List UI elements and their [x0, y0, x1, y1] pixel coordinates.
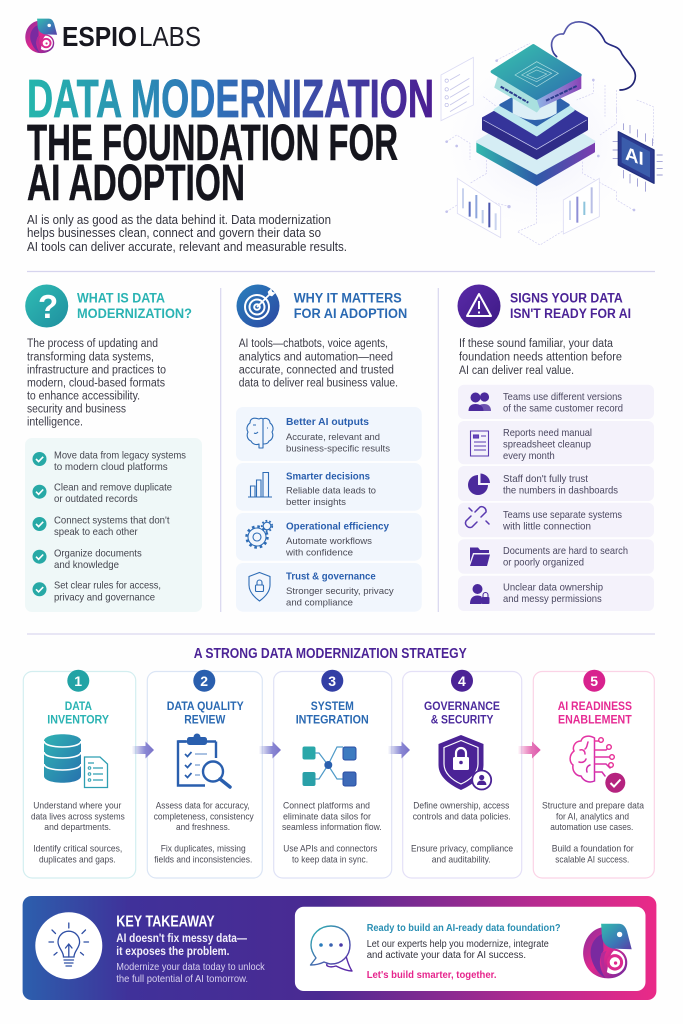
- number badge: 3: [328, 673, 336, 689]
- number badge: 1: [74, 673, 82, 689]
- step text: [282, 801, 382, 866]
- step text: Define ownership, access: [413, 801, 510, 812]
- sign: manual reports: spreadsheet cleanup: [503, 438, 591, 450]
- step heading: ENABLEMENT: [558, 712, 632, 726]
- card: better AI outputs: [236, 407, 422, 461]
- icon: target: [236, 284, 280, 328]
- description: [27, 338, 166, 428]
- icon: person with lock: [470, 584, 490, 604]
- check item 1: to modern cloud platforms: [54, 461, 168, 473]
- check item 2: or outdated records: [54, 493, 138, 505]
- step text: Fix duplicates, missing: [161, 843, 246, 854]
- check item 4: and knowledge: [54, 559, 119, 571]
- check item 5: privacy and governance: [54, 592, 155, 604]
- icon: chameleon logo mark: [25, 19, 57, 53]
- step text: scalable AI success.: [555, 855, 629, 866]
- step heading: AI READINESS: [558, 699, 632, 713]
- icon: people: [468, 392, 491, 411]
- step text: seamless information flow.: [282, 822, 382, 833]
- step heading: GOVERNANCE: [424, 699, 500, 713]
- hero illustration: isometric data stack with cloud and AI chip: [430, 22, 663, 245]
- intro text: [27, 213, 347, 254]
- sign: separate systems: Teams use separate systems: [503, 509, 622, 521]
- step text: eliminate data silos for: [283, 811, 371, 822]
- icon: warning: [458, 284, 500, 328]
- step text: automation use cases.: [550, 822, 633, 833]
- bar chart card left: [457, 178, 501, 238]
- call to action text: Let's build smarter, together.: [367, 969, 497, 981]
- step text: for AI, analytics and: [556, 811, 629, 822]
- step heading: DATA: [65, 699, 92, 713]
- icon: broken chain link: [466, 507, 489, 527]
- card: trust and governance: and compliance: [286, 598, 353, 608]
- arrow: step 4 to step 5: [518, 742, 541, 758]
- step text: and freshness.: [176, 822, 230, 833]
- number badge: [321, 670, 343, 692]
- description: [239, 338, 398, 390]
- step text: completeness, consistency: [154, 811, 254, 822]
- number badge: [67, 670, 89, 692]
- logo: Espio Labs: [25, 19, 201, 53]
- card: smarter decisions: [236, 463, 422, 511]
- step heading: [296, 699, 369, 726]
- takeaway text: the full potential of AI tomorrow.: [116, 974, 248, 985]
- step text: [411, 801, 513, 866]
- icon: chameleon mark: [583, 924, 632, 978]
- description: foundation needs attention before: [459, 352, 622, 364]
- number badge: [583, 670, 605, 692]
- stack: base layer: [477, 107, 594, 185]
- icon: shield lock: [249, 572, 270, 601]
- icon: AI chip: AI: [625, 144, 644, 170]
- card: operational efficiency: [236, 513, 422, 561]
- description: If these sound familiar, your data: [459, 338, 614, 350]
- heading: MODERNIZATION?: [77, 306, 192, 321]
- step 3: system integration: [274, 670, 392, 878]
- sign: hard to search documents: [458, 539, 654, 574]
- stack: navy layer: [483, 88, 587, 158]
- sign: separate systems: with little connection: [502, 520, 591, 532]
- arrow: step 2 to step 3: [259, 742, 281, 758]
- takeaway text: AI doesn't fix messy data—: [116, 933, 247, 945]
- call to action text: Ready to build an AI-ready data foundation?: [367, 922, 560, 934]
- heading: [510, 290, 631, 321]
- check item 2: Clean and remove duplicate: [54, 482, 172, 494]
- step heading: INTEGRATION: [296, 712, 369, 726]
- card: operational efficiency: Automate workflows: [286, 536, 372, 547]
- card: better AI outputs: business-specific results: [286, 444, 390, 455]
- sign: manual reports: every month: [503, 450, 555, 462]
- sign: distrust of dashboards: [458, 466, 654, 501]
- wordmark: ESPIO: [62, 21, 137, 52]
- call to action text: Let our experts help you modernize, integrate: [367, 939, 549, 950]
- step heading: REVIEW: [184, 712, 226, 726]
- arrow: step 3 to step 4: [388, 742, 410, 758]
- step heading: DATA QUALITY: [167, 699, 244, 713]
- takeaway text: [116, 914, 266, 985]
- title: AI ADOPTION: [27, 154, 245, 211]
- step text: data lives across systems: [31, 811, 125, 822]
- card: smarter decisions: Reliable data leads to: [286, 486, 376, 496]
- intro text: AI is only as good as the data behind it. Data modernization: [27, 213, 331, 227]
- step heading: & SECURITY: [431, 712, 493, 726]
- number badge: [451, 670, 473, 692]
- step heading: [558, 699, 632, 726]
- step text: and auditability.: [432, 855, 491, 866]
- wordmark: LABS: [139, 21, 201, 52]
- step text: and departments.: [44, 822, 111, 833]
- step text: Understand where your: [33, 801, 121, 812]
- number badge: [193, 670, 215, 692]
- icon: gears: [246, 521, 272, 548]
- step text: Assess data for accuracy,: [156, 801, 250, 812]
- card: smarter decisions: Smarter decisions: [286, 470, 370, 482]
- icon: database and document: [44, 734, 108, 788]
- step heading: SYSTEM: [311, 699, 354, 713]
- card: trust and governance: Trust & governance: [286, 570, 376, 582]
- step text: to keep data in sync.: [292, 855, 368, 866]
- step text: Ensure privacy, compliance: [411, 843, 513, 854]
- document card: [441, 57, 473, 121]
- sign: separate systems: [458, 503, 654, 537]
- step text: [542, 801, 645, 866]
- icon: report document: [470, 431, 488, 456]
- sign: hard to search documents: or poorly organized: [503, 556, 584, 568]
- step text: fields and inconsistencies.: [154, 855, 252, 866]
- icon: pie chart: [468, 474, 490, 495]
- call to action text: and activate your data for AI success.: [367, 950, 526, 961]
- check item 5: Set clear rules for access,: [54, 580, 161, 592]
- card: operational efficiency: Operational efficiency: [286, 520, 389, 532]
- wordmark: [62, 21, 201, 52]
- step text: Structure and prepare data: [542, 801, 645, 812]
- card: smarter decisions: better insights: [286, 497, 346, 508]
- description: The process of updating and: [27, 338, 158, 350]
- sign: distrust of dashboards: the numbers in dashboards: [503, 484, 618, 496]
- sign: unclear ownership: and messy permissions: [503, 593, 602, 605]
- description: to enhance accessibility.: [27, 390, 140, 402]
- card: better AI outputs: Accurate, relevant and: [286, 432, 380, 443]
- step text: Build a foundation for: [552, 843, 634, 854]
- sign: manual reports: [458, 421, 654, 464]
- check item 2: [32, 482, 172, 505]
- intro text: helps businesses clean, connect and govern their data so: [27, 226, 321, 240]
- check item 1: Move data from legacy systems: [54, 450, 186, 462]
- sign: unclear ownership: Unclear data ownership: [503, 582, 603, 594]
- circuit lines: [447, 43, 653, 245]
- description: data to deliver real business value.: [239, 378, 398, 390]
- icon: cloud: [552, 22, 635, 90]
- description: [459, 338, 622, 377]
- step text: [154, 801, 254, 866]
- number badge: 4: [458, 673, 466, 689]
- icon: question mark: ?: [38, 288, 58, 325]
- check item 5: [32, 580, 161, 604]
- step 2: data quality review: [147, 670, 262, 878]
- bar chart card right: [563, 178, 599, 234]
- step heading: INVENTORY: [47, 712, 109, 726]
- icon: chat bubbles: [310, 926, 352, 971]
- check item 4: [32, 548, 142, 571]
- sign: unclear ownership: [458, 576, 654, 611]
- icon: light bulb: [35, 912, 102, 979]
- panel: what is data modernization: [25, 284, 202, 612]
- icon: connected systems: [302, 746, 356, 786]
- icon: question mark: [25, 284, 68, 328]
- icon: shield with lock and user badge: [438, 735, 491, 790]
- description: analytics and automation—need: [239, 352, 393, 364]
- card: trust and governance: [236, 563, 422, 612]
- check item 1: [32, 450, 186, 473]
- description: transforming data systems,: [27, 352, 154, 364]
- step text: Identify critical sources,: [33, 843, 122, 854]
- number badge: 5: [590, 673, 598, 689]
- check item 3: [32, 514, 170, 538]
- stack: upper rings: [495, 82, 573, 135]
- description: infrastructure and practices to: [27, 364, 166, 376]
- description: intelligence.: [27, 416, 83, 428]
- heading: WHAT IS DATA: [77, 290, 165, 306]
- heading: [294, 290, 407, 321]
- step text: controls and data policies.: [413, 811, 511, 822]
- sign: customer record versions: of the same customer record: [503, 402, 623, 414]
- step 1: data inventory: [23, 670, 136, 878]
- sign: customer record versions: [458, 385, 654, 419]
- divider: [27, 633, 655, 635]
- heading: SIGNS YOUR DATA: [510, 290, 623, 306]
- step 5: AI readiness enablement: [533, 670, 654, 878]
- divider: [27, 270, 655, 272]
- section heading: strategy: A STRONG DATA MODERNIZATION STRATEGY: [194, 646, 467, 662]
- takeaway text: Modernize your data today to unlock: [116, 962, 266, 973]
- icon: clipboard and magnifier: [178, 734, 230, 787]
- sign: hard to search documents: Documents are hard to search: [503, 545, 628, 557]
- step text: duplicates and gaps.: [39, 855, 116, 866]
- number badge: 2: [200, 673, 208, 689]
- description: accurate, connected and trusted: [239, 364, 394, 376]
- step text: [31, 801, 125, 866]
- takeaway text: KEY TAKEAWAY: [116, 914, 215, 930]
- step text: Use APIs and connectors: [283, 843, 378, 854]
- heading: FOR AI ADOPTION: [294, 306, 407, 321]
- icon: AI chip: [613, 123, 663, 192]
- takeaway text: it exposes the problem.: [116, 946, 230, 958]
- check item 3: speak to each other: [54, 526, 138, 538]
- stack: top plate: [492, 46, 581, 112]
- icon: AI brain with check: [570, 736, 625, 793]
- icon: bar chart: [248, 472, 272, 497]
- description: AI can deliver real value.: [459, 365, 574, 377]
- intro text: AI tools can deliver accurate, relevant and measurable results.: [27, 240, 347, 254]
- heading: [77, 290, 192, 321]
- description: modern, cloud-based formats: [27, 378, 165, 390]
- heading: ISN'T READY FOR AI: [510, 306, 631, 321]
- title: [27, 69, 434, 211]
- step heading: [424, 699, 500, 726]
- call to action text: [367, 922, 560, 981]
- checklist panel: [25, 438, 202, 612]
- title: THE FOUNDATION FOR: [27, 114, 398, 171]
- card: operational efficiency: with confidence: [285, 548, 353, 558]
- description: security and business: [27, 404, 126, 416]
- sign: customer record versions: Teams use different versions: [503, 391, 622, 403]
- sign: distrust of dashboards: Staff don't fully trust: [503, 473, 588, 485]
- card: trust and governance: Stronger security, privacy: [286, 586, 394, 597]
- step heading: [47, 699, 109, 726]
- arrow: step 1 to step 2: [132, 742, 154, 758]
- icon: brain: [247, 418, 273, 448]
- title: DATA MODERNIZATION: [27, 69, 434, 129]
- panel: signs your data isn't ready for AI: [458, 284, 654, 611]
- call to action card: [295, 907, 646, 991]
- description: AI tools—chatbots, voice agents,: [239, 338, 388, 350]
- panel: why it matters for AI adoption: [236, 284, 422, 612]
- sign: manual reports: Reports need manual: [503, 427, 592, 439]
- check item 3: Connect systems that don't: [54, 514, 170, 526]
- card: better AI outputs: Better AI outputs: [286, 416, 369, 428]
- icon: folder: [470, 548, 490, 566]
- key takeaway banner: [23, 896, 656, 1000]
- step 4: governance and security: [403, 670, 522, 878]
- check item 4: Organize documents: [54, 548, 142, 560]
- step heading: [167, 699, 244, 726]
- heading: WHY IT MATTERS: [294, 290, 402, 306]
- step text: Connect platforms and: [283, 801, 370, 812]
